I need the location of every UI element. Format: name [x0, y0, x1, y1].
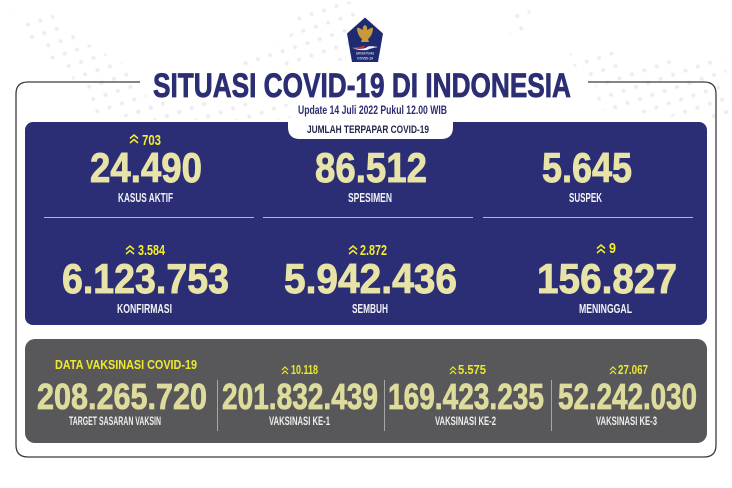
tab: jumlah terpapar [288, 122, 453, 139]
title: SITUASI COVID-19 DI INDONESIA [153, 67, 571, 105]
stat: vaksinasi ke-3 [558, 363, 697, 428]
stat: kasus aktif: 24.490 [90, 144, 202, 191]
stat: vaksinasi ke-3: VAKSINASI KE-3 [596, 416, 657, 428]
stat: sembuh: SEMBUH [352, 301, 388, 316]
heading: data vaksinasi: DATA VAKSINASI COVID-19 [55, 357, 197, 372]
stat: konfirmasi: KONFIRMASI [117, 301, 172, 316]
stat: kasus aktif [90, 133, 202, 205]
stat: meninggal: 9 [609, 241, 616, 257]
stat: kasus aktif: KASUS AKTIF [118, 190, 173, 205]
stat: meninggal: MENINGGAL [579, 301, 632, 316]
stat: sembuh: 5.942.436 [284, 255, 457, 302]
stat: sembuh: 2.872 [360, 243, 387, 259]
stat: target sasaran vaksin [37, 376, 207, 428]
logo: Satuan Tugas COVID-19 [347, 18, 383, 62]
stat: target sasaran vaksin: TARGET SASARAN VAKSIN [69, 416, 161, 428]
tab: jumlah terpapar: JUMLAH TERPAPAR COVID-19 [307, 124, 429, 136]
stat: vaksinasi ke-1 [222, 363, 378, 428]
stat: target sasaran vaksin: 208.265.720 [37, 376, 207, 417]
stat: spesimen: 86.512 [315, 144, 427, 191]
stat: vaksinasi ke-1: 10.118 [291, 363, 318, 377]
logo: Satuan Tugas COVID-19: SATUAN TUGAS [356, 50, 374, 56]
stat: vaksinasi ke-3: 27.067 [618, 363, 648, 377]
stat: sembuh [284, 243, 457, 316]
panel: data vaksinasi [25, 339, 707, 443]
stat: spesimen: SPESIMEN [348, 190, 392, 205]
stat: vaksinasi ke-1: 201.832.439 [222, 376, 378, 417]
stat: meninggal [537, 241, 677, 316]
stat: vaksinasi ke-2: 169.423.235 [388, 376, 544, 417]
stat: konfirmasi: 6.123.753 [62, 255, 229, 302]
stat: vaksinasi ke-2: VAKSINASI KE-2 [435, 416, 496, 428]
stat: konfirmasi [62, 243, 229, 316]
outer frame [16, 82, 716, 457]
update date: Update 14 Juli 2022 Pukul 12.00 WIB [298, 105, 447, 117]
stat: suspek: SUSPEK [569, 190, 602, 205]
stat: meninggal: 156.827 [537, 255, 677, 302]
stat: spesimen [315, 144, 427, 205]
stat: vaksinasi ke-2 [388, 363, 544, 428]
logo: Satuan Tugas COVID-19: COVID-19 [357, 56, 374, 60]
stat: kasus aktif: 703 [142, 133, 161, 149]
panel: jumlah terpapar [25, 122, 707, 325]
stat: suspek [542, 144, 632, 205]
stat: konfirmasi: 3.584 [138, 243, 165, 259]
stat: vaksinasi ke-1: VAKSINASI KE-1 [269, 416, 330, 428]
stat: vaksinasi ke-2: 5.575 [458, 363, 486, 377]
stat: suspek: 5.645 [542, 144, 632, 191]
